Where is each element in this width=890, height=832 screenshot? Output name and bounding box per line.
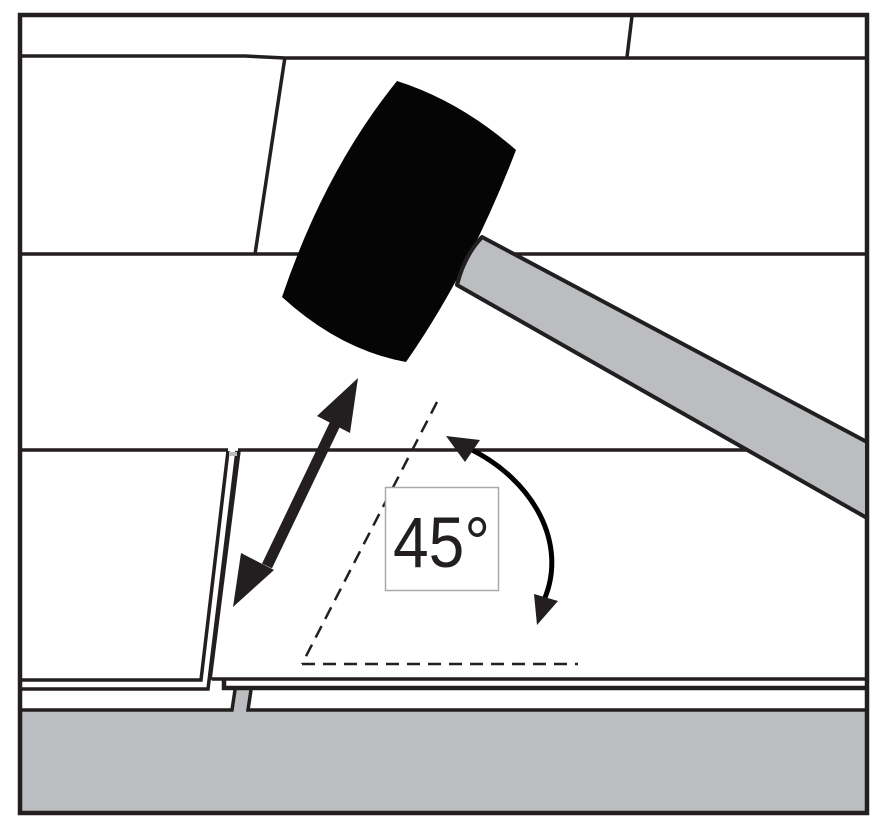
joint cap: [229, 452, 237, 456]
raised plank and tongue-and-groove joint: [20, 451, 867, 710]
curved arrow: angle: [446, 436, 558, 625]
angle label: 45 degrees: 45°: [393, 504, 490, 583]
mallet neck edge: [457, 237, 482, 285]
mallet head: [282, 81, 516, 362]
dashed 45 degree guide lines: [302, 402, 578, 664]
mallet handle: [457, 237, 867, 518]
subfloor: grey base: [20, 690, 867, 813]
double arrow: distance: [233, 378, 358, 607]
floor plank lines: [20, 16, 867, 450]
